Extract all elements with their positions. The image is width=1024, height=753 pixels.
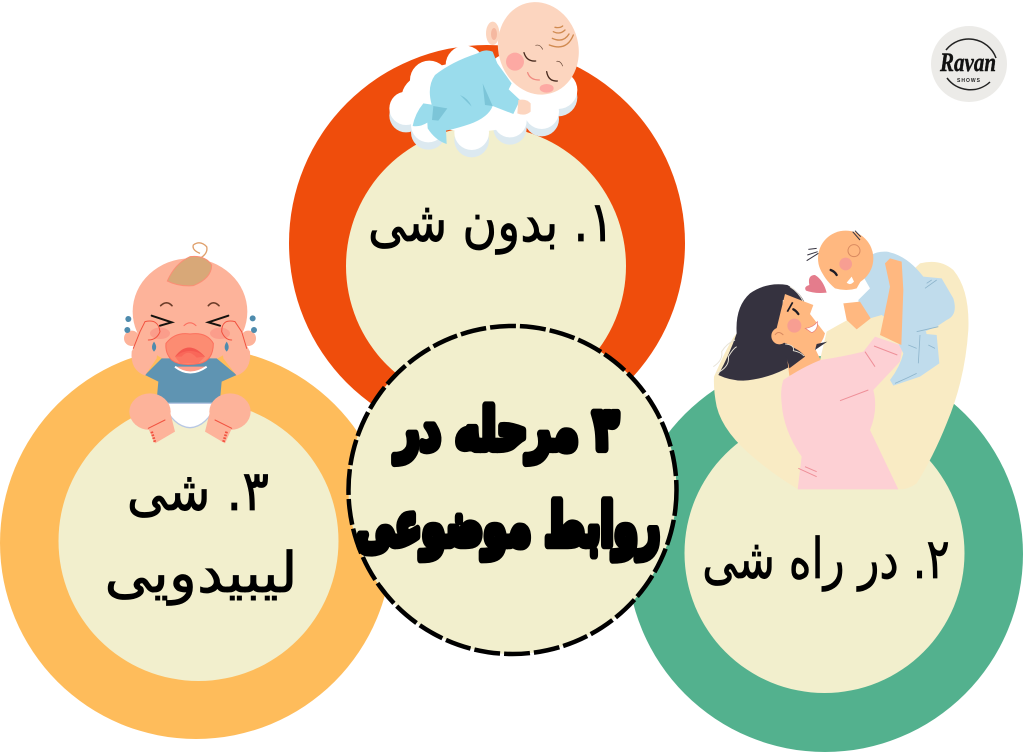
logo: Ravan: [939, 48, 996, 77]
panel: stage 3 circle: [0, 347, 392, 739]
text: stage 3 label: ۳. شی: [127, 458, 269, 524]
baby head: [818, 231, 873, 286]
arm and hands: [880, 258, 903, 345]
logo: SHOWS: [957, 78, 981, 84]
title: روابط موضوعی: [356, 491, 660, 560]
text: stage 3 label: لیبیدویی: [104, 541, 298, 606]
panel: stage 2 circle: [627, 356, 1023, 752]
heart: [805, 275, 827, 293]
title: ۳ مرحله در: [393, 396, 618, 464]
arms: [131, 320, 159, 376]
text: stage 1 label: ۱. بدون شی: [368, 190, 614, 255]
woman hair: [718, 284, 805, 381]
baby romper: [858, 252, 955, 386]
hair lock: [776, 341, 805, 368]
icon: mother lifting baby: [713, 231, 968, 489]
shirt: [145, 358, 237, 406]
body: [781, 337, 903, 489]
icon: crying baby: [124, 243, 257, 443]
text: stage 2 label: ۲. در راه شی: [702, 526, 950, 591]
logo: [931, 26, 1007, 102]
legs: [129, 393, 171, 430]
tears: [124, 315, 257, 352]
panel: central title circle: [348, 326, 676, 654]
icon: sleeping baby on cloud: [389, 0, 589, 157]
panel: stage 1 circle: [289, 45, 685, 441]
text: stage 3 label: [104, 458, 298, 606]
title: [356, 396, 660, 560]
neck and face: [775, 294, 825, 376]
face: [150, 328, 170, 339]
